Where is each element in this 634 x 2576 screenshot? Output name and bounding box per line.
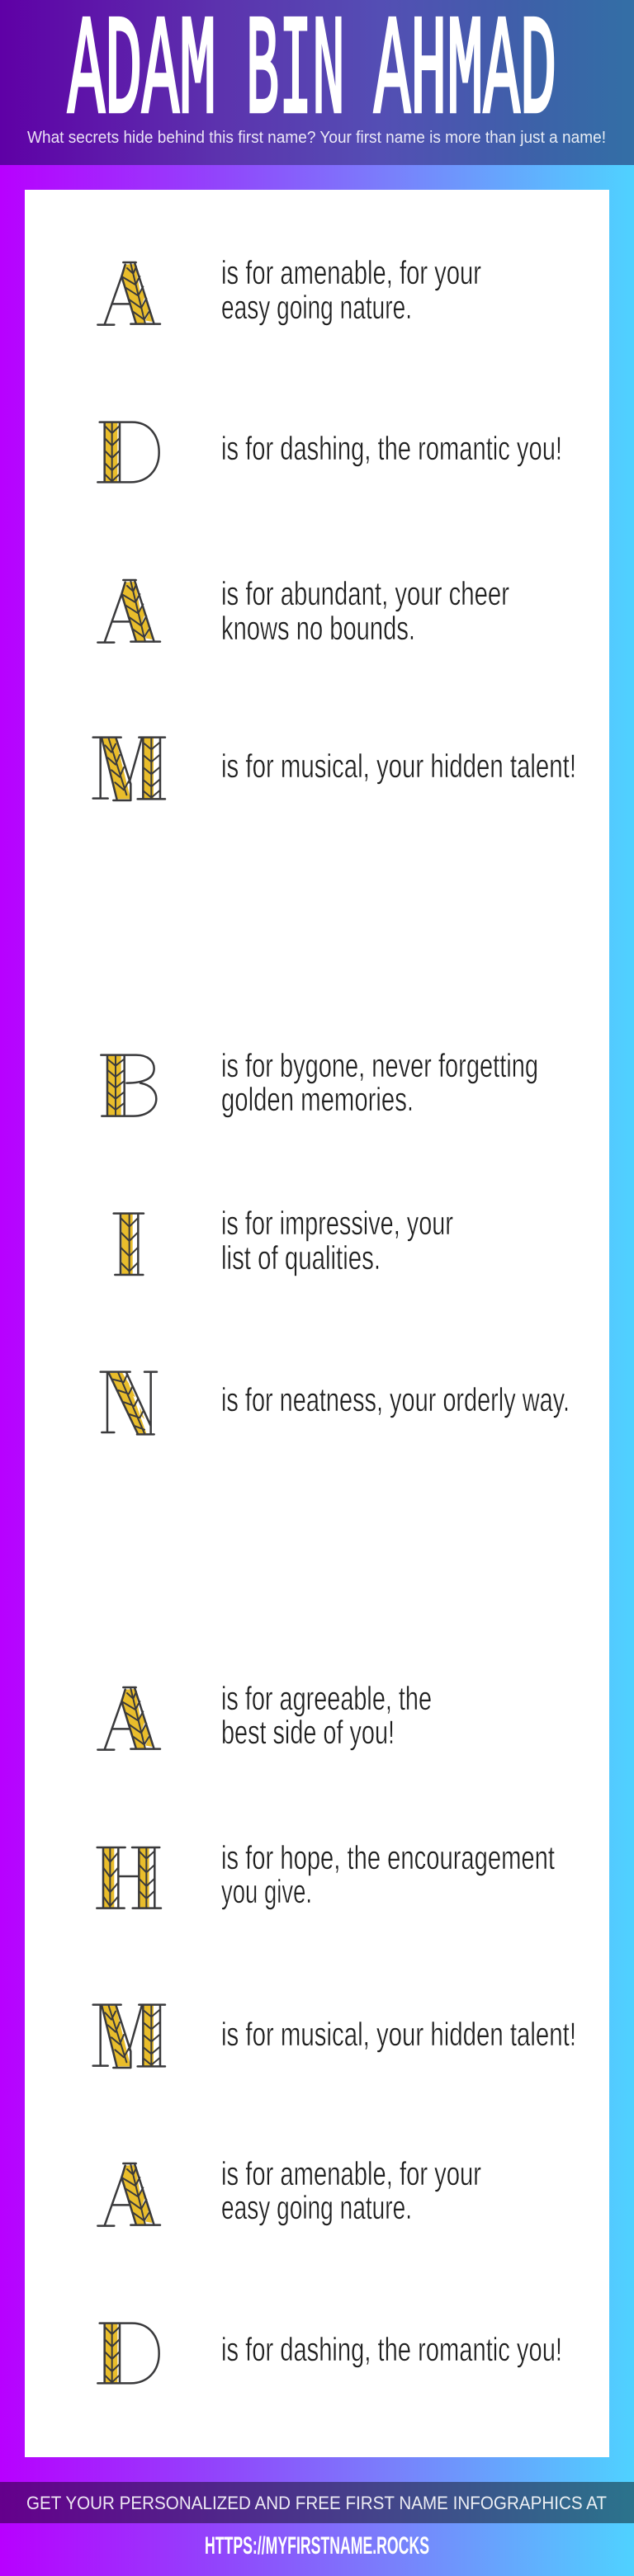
text: is for abundant, your cheer (221, 576, 509, 612)
row: D dashing (97, 422, 562, 482)
icon: wheat letter M (93, 738, 165, 800)
text (221, 1681, 432, 1751)
text (221, 1205, 453, 1276)
icon: wheat letter A (97, 2163, 160, 2226)
icon: wheat letter N (101, 1372, 157, 1434)
text: golden memories. (221, 1082, 414, 1118)
footer band (0, 2482, 634, 2523)
row: A abundant (97, 576, 509, 647)
icon: wheat letter A (97, 1687, 160, 1750)
row: M musical (93, 738, 576, 800)
icon: wheat letter H (97, 1847, 161, 1908)
icon: wheat letter I (114, 1214, 144, 1275)
text: easy going nature. (221, 290, 412, 326)
icon: wheat letter A (97, 580, 160, 643)
text: easy going nature. (221, 2190, 412, 2226)
text: is for agreeable, the (221, 1681, 432, 1717)
row: A agreeable (97, 1681, 432, 1751)
row: N neatness (101, 1372, 570, 1434)
icon: wheat letter D (97, 422, 159, 482)
row: H hope (97, 1840, 555, 1910)
row: D dashing (97, 2324, 562, 2383)
text (221, 1048, 538, 1118)
footer url: HTTPS://MYFIRSTNAME.ROCKS (205, 2532, 429, 2559)
icon: wheat letter B (101, 1055, 156, 1116)
icon: wheat letter D (97, 2324, 159, 2383)
header band (0, 0, 634, 165)
row: I impressive (114, 1205, 453, 1276)
row: B bygone (101, 1048, 538, 1118)
text: knows no bounds. (221, 611, 415, 647)
text (221, 255, 481, 326)
text: is for amenable, for your (221, 255, 481, 291)
text: is for impressive, your (221, 1205, 453, 1242)
icon: wheat letter A (97, 262, 160, 325)
footer call to action: GET YOUR PERSONALIZED AND FREE FIRST NAME INFOGRAPHICS AT (26, 2493, 607, 2513)
row: A amenable (97, 255, 481, 326)
row: M musical (93, 2005, 576, 2068)
text: is for amenable, for your (221, 2156, 481, 2192)
text (221, 576, 509, 647)
text (221, 1840, 555, 1910)
text: list of qualities. (221, 1240, 381, 1276)
row: A amenable (97, 2156, 481, 2226)
subtitle: What secrets hide behind this first name? Your first name is more than just a name! (27, 129, 606, 147)
text (221, 2156, 481, 2226)
text: best side of you! (221, 1715, 395, 1751)
title (68, 0, 556, 154)
icon: wheat letter M (93, 2005, 165, 2068)
text: you give. (221, 1874, 312, 1910)
